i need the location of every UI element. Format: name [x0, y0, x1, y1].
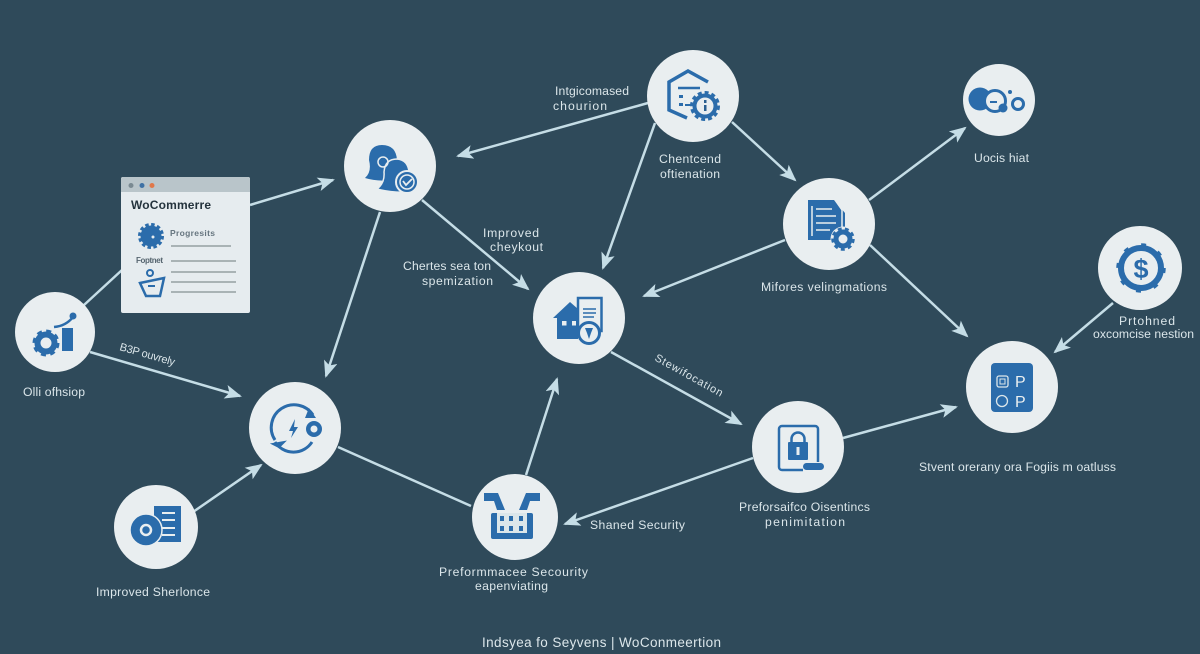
line: shop to window	[84, 270, 122, 305]
icon: basket	[140, 270, 164, 296]
node: speed	[249, 382, 341, 474]
icon: gear	[140, 224, 162, 248]
label: improved checkout	[483, 226, 544, 254]
arrow: lock to basket	[565, 458, 753, 524]
icon: house and document	[553, 298, 602, 344]
label: experience: Improved Sherlonce	[96, 585, 210, 599]
arrow: settings to checkout	[603, 123, 655, 268]
label: lock: penimitation	[765, 515, 845, 529]
label: shop: Olli ofhsiop	[23, 385, 85, 399]
label: shared security: Shaned Security	[590, 518, 686, 532]
arrow: window to customers	[250, 180, 333, 205]
node: document	[783, 178, 875, 270]
node: payment	[1098, 226, 1182, 310]
node: experience	[114, 485, 198, 569]
arrow: shop to speed	[90, 352, 240, 396]
arrow: settings to document	[732, 122, 795, 180]
window title: WoCommerre	[131, 198, 211, 212]
icon: document and gear	[808, 200, 856, 252]
arrow: checkout to lock	[611, 352, 741, 424]
label: lock: Preforsaifco Oisentincs	[739, 500, 870, 514]
label: top centre: chourion	[553, 99, 607, 113]
arrow: customers to checkout	[422, 200, 528, 289]
label: arrow note: B3P ouvrely	[118, 341, 177, 369]
arrow: experience to speed	[193, 465, 261, 512]
line: speed to basket	[338, 447, 471, 506]
icon: refresh cycle and bolt	[271, 405, 322, 452]
node: shop	[15, 292, 95, 372]
arrow: payment to plugin	[1055, 303, 1113, 352]
node: lock	[752, 401, 844, 493]
panel: WooCommerce window	[121, 177, 250, 313]
node: checkout	[533, 272, 625, 364]
footer label: Foptnet	[136, 256, 163, 265]
node: settings	[647, 50, 739, 142]
label: payment: Prtohned	[1119, 314, 1175, 328]
label: top centre	[553, 84, 629, 113]
arrow: lock to plugin	[843, 407, 956, 438]
progress label: Progresits	[170, 228, 215, 238]
label: payment	[1093, 314, 1194, 341]
icon: hexagon and gear	[669, 71, 718, 120]
label: session optimization: Chertes sea ton	[403, 259, 491, 273]
icon: blue card: P	[1015, 394, 1026, 411]
text lines	[171, 246, 236, 292]
connectors	[84, 103, 1113, 524]
icon: overlapping circles	[968, 88, 1024, 113]
label: top centre: Intgicomased	[555, 84, 629, 98]
label: basket	[439, 565, 589, 593]
label: improved checkout: cheykout	[490, 240, 544, 254]
label: document: Mifores velingmations	[761, 280, 887, 294]
node: basket	[472, 474, 558, 560]
node: plugin	[966, 341, 1058, 433]
label: settings: oftienation	[660, 167, 720, 181]
label: session optimization: spemization	[422, 274, 493, 288]
label: basket: Preformmacee Secourity	[439, 565, 589, 579]
arrow: customers to speed	[326, 212, 380, 376]
icon: gear and chart	[34, 312, 76, 355]
icon: blue card: P	[1015, 374, 1026, 391]
arrow: document to checkout	[644, 240, 785, 296]
label: plugin: Stvent orerany ora Fogiis m oatluss	[919, 460, 1116, 474]
arrow: document to plugin	[870, 245, 967, 336]
label: session optimization	[403, 259, 493, 288]
label: arrow note right: Stewifocation	[653, 352, 725, 399]
label: basket: eapenviating	[475, 579, 548, 593]
icon: basket with handles	[484, 493, 540, 539]
arrow: settings to customers	[458, 103, 648, 156]
icon: padlock in frame	[779, 426, 824, 470]
node: tools	[963, 64, 1035, 136]
icon: disc and document	[130, 506, 181, 546]
footer caption: Indsyea fo Seyvens | WoConmeertion	[482, 635, 721, 650]
icon: chat bubbles	[365, 145, 418, 193]
label: improved checkout: Improved	[483, 226, 539, 240]
arrow: document to tools	[869, 128, 965, 200]
icon: dollar gear: $	[1133, 254, 1149, 284]
arrow: basket to checkout	[526, 379, 557, 475]
icon: blue card	[991, 363, 1033, 412]
node: customers	[344, 120, 436, 212]
label: payment: oxcomcise nestion	[1093, 327, 1194, 341]
label: settings	[659, 152, 721, 181]
label: settings: Chentcend	[659, 152, 721, 166]
label: lock	[739, 500, 870, 529]
label: tools: Uocis hiat	[974, 151, 1030, 165]
